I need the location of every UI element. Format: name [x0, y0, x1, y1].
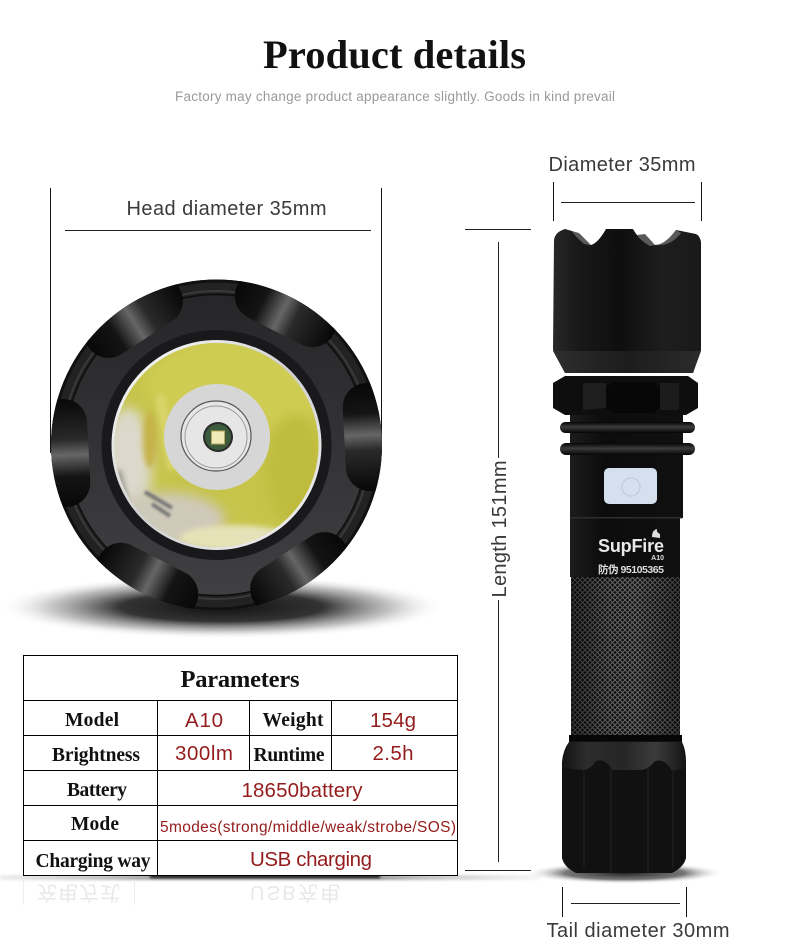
row: brightness and runtime: [52, 742, 414, 766]
centre disc: [164, 384, 270, 490]
title: Product details: [263, 32, 526, 77]
row: brightness and runtime: Runtime: [254, 745, 325, 766]
icon: flashlight head front view: [51, 280, 382, 610]
row: model and weight: 154g: [370, 709, 416, 732]
row: brightness and runtime: 2.5h: [372, 742, 414, 765]
row: model and weight: Model: [65, 710, 120, 731]
head bezel with crown: [553, 229, 701, 373]
flashlight ground shadow: [525, 862, 725, 884]
row: model and weight: Weight: [262, 710, 324, 731]
row: battery: [67, 779, 363, 802]
table ground reflection: USB充电: [250, 881, 340, 904]
brand mark: SupFire: [598, 536, 664, 556]
head shadow: [0, 575, 447, 639]
heading: parameters: Parameters: [180, 666, 300, 693]
brand mark: 防伪 95105365: [598, 563, 664, 576]
row: battery: Battery: [67, 780, 127, 801]
row: charging way: [36, 848, 372, 872]
row: model and weight: A10: [185, 709, 223, 732]
row: model and weight: [65, 709, 416, 732]
brand mark: [598, 529, 664, 576]
row: mode: 5modes(strong/middle/weak/strobe/SOS): [160, 819, 456, 836]
reflector: [114, 343, 318, 547]
brand mark: A10: [651, 555, 664, 562]
icon: flashlight side view: [553, 229, 701, 873]
panel: parameters table: [23, 656, 458, 876]
row: battery: 18650battery: [242, 779, 363, 802]
row: mode: Mode: [71, 814, 119, 835]
black bezel ring: [102, 330, 332, 560]
reflector rim: [112, 340, 322, 550]
tail cap: [562, 735, 686, 873]
table ground reflection: 充电方式: [37, 880, 120, 909]
knurled grip: [571, 577, 680, 735]
dimension: length: Length 151mm: [489, 460, 511, 598]
subtitle: Factory may change product appearance slightly. Goods in kind prevail: [175, 89, 615, 104]
neck and barrel: [570, 415, 683, 518]
row: charging way: Charging way: [36, 851, 151, 872]
row: charging way: USB charging: [250, 848, 372, 871]
row: mode: [71, 814, 456, 836]
table ground reflection: [0, 875, 540, 909]
LED emitter: [203, 422, 233, 452]
row: brightness and runtime: Brightness: [52, 745, 140, 766]
row: brightness and runtime: 300lm: [175, 742, 233, 765]
power button: [604, 468, 657, 504]
dimension: body diameter: Diameter 35mm: [548, 154, 696, 176]
hex collar: [553, 376, 698, 415]
dimension: head diameter: Head diameter 35mm: [126, 198, 326, 220]
rings: [560, 422, 695, 455]
dimension: tail diameter: Tail diameter 30mm: [546, 920, 730, 942]
